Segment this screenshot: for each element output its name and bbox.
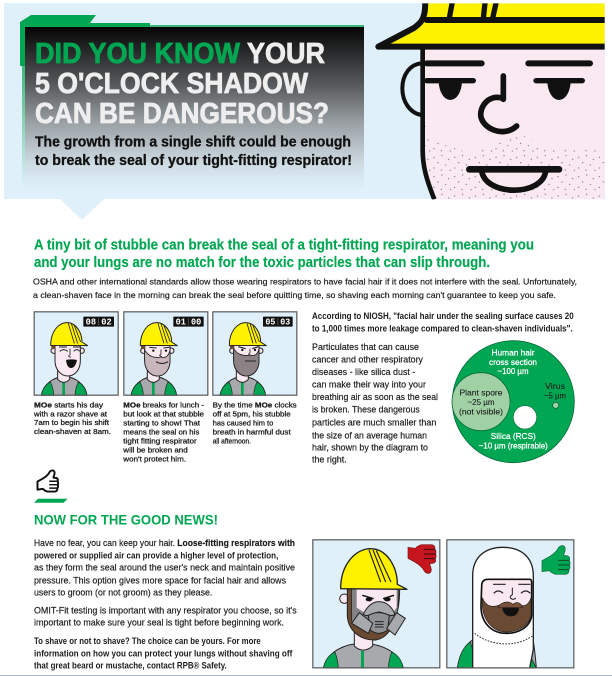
- headline: [34, 238, 534, 271]
- particulates paragraph: particles are much smaller than: [312, 418, 436, 428]
- good news paragraph 1: users to groom (or not groom) as they please.: [34, 588, 212, 598]
- particulates paragraph: breathing air as soon as the seal: [312, 392, 438, 402]
- illustration: worker face with hard hat: [378, 0, 605, 199]
- title: DID YOU KNOW YOUR: [35, 38, 325, 70]
- panel: bearded worker with loose-fitting hood: [446, 539, 574, 668]
- header banner: [4, 0, 605, 220]
- caption panel 2: will be broken and: [122, 446, 188, 454]
- good news paragraph 2: OMIT-Fit testing is important with any respirator you choose, so it's: [34, 605, 297, 615]
- caption panel 2: means the seal on his: [123, 428, 200, 436]
- virus: [544, 381, 566, 408]
- caption panel 1: [33, 400, 111, 436]
- good news heading: NOW FOR THE GOOD NEWS!: [34, 512, 218, 527]
- subtitle: The growth from a single shift could be enough: [35, 134, 351, 150]
- caption panel 1: clean-shaven at 8am.: [34, 427, 111, 436]
- caption panel 3: [213, 400, 297, 446]
- clock 08 02: 08 02: [86, 318, 112, 328]
- silica: Silica (RCS): [491, 431, 536, 441]
- human hair label: Human hair: [492, 348, 535, 358]
- plant spore: (not visible): [459, 406, 503, 416]
- caption panel 1: MOe starts his day: [34, 400, 103, 410]
- body: [457, 638, 536, 668]
- title: 5 O'CLOCK SHADOW: [35, 68, 309, 100]
- plant spore: [452, 373, 510, 431]
- virus: ~5 µm: [544, 390, 566, 400]
- icon: thumbs up outline: [37, 470, 58, 492]
- intro paragraph: a clean-shaven face in the morning can break the seal before quitting time, so shaving each morning can't guarantee to keep you safe.: [33, 290, 556, 300]
- NIOSH quote: [312, 311, 574, 334]
- green title tab: [20, 15, 364, 188]
- good news paragraph 3: [34, 636, 293, 671]
- panel: bearded worker with tight-fitting respirator: [312, 539, 440, 668]
- good news paragraph 1: Have no fear, you can keep your hair. Loose-fitting respirators with: [34, 538, 295, 548]
- plant spore: Plant spore: [460, 388, 503, 398]
- hard hat: [341, 549, 407, 589]
- particulates paragraph: is broken. These dangerous: [312, 405, 420, 415]
- good news paragraph 1: [34, 538, 295, 598]
- intro paragraph: OSHA and other international standards allow those wearing respirators to have facial hair if it does not interfere with the seal. Unfortunately,: [33, 276, 577, 286]
- headline: and your lungs are no match for the toxic particles that can slip through.: [34, 255, 490, 271]
- good news paragraph 3: that great beard or mustache, contact RPB® Safety.: [34, 661, 227, 671]
- eyes and nose: [493, 584, 530, 593]
- particulates paragraph: can make their way into your: [312, 380, 426, 390]
- intro paragraph: [33, 276, 577, 300]
- particulates paragraph: [312, 342, 438, 465]
- good news paragraph 1: pressure. This option gives more space for facial hair and allows: [34, 575, 286, 585]
- good news paragraph 2: important to make sure your seal is tight before beginning work.: [34, 618, 284, 628]
- human hair label: ~100 µm: [498, 366, 528, 376]
- caption panel 1: 7am to begin his shift: [34, 418, 110, 427]
- green accent bar: [34, 499, 68, 503]
- comic panel 1: clean-shaven at 8am: [34, 311, 119, 396]
- beard: [482, 598, 531, 632]
- silica: ~10 µm (respirable): [479, 440, 548, 450]
- body: [323, 629, 403, 668]
- icon: thumbs up: [542, 546, 570, 574]
- title: [35, 38, 329, 130]
- particulates paragraph: the size of an average human: [312, 430, 427, 440]
- human hair label: cross section: [489, 357, 537, 367]
- caption panel 2: starting to show! That: [123, 418, 201, 428]
- human hair label: [489, 348, 537, 376]
- virus: Virus: [545, 381, 565, 391]
- clock 01 00: 01 00: [176, 318, 201, 328]
- headline: A tiny bit of stubble can break the seal of a tight-fitting respirator, meaning you: [34, 238, 534, 254]
- particulates paragraph: the right.: [312, 455, 347, 465]
- caption panel 2: won't protect him.: [122, 454, 186, 464]
- particulates paragraph: cancer and other respiratory: [312, 354, 423, 364]
- subtitle: to break the seal of your tight-fitting respirator!: [35, 152, 352, 169]
- comic panel 3: full stubble at 5pm: [212, 311, 297, 396]
- caption panel 3: all afternoon.: [213, 436, 251, 446]
- particulates paragraph: hair, shown by the diagram to: [312, 443, 428, 453]
- title box: [25, 27, 364, 189]
- subtitle: [35, 134, 352, 169]
- caption panel 2: MOe breaks for lunch -: [123, 400, 204, 410]
- clock 05 03: 05 03: [265, 318, 290, 328]
- good news paragraph 3: information on how you can protect your lungs without shaving off: [34, 648, 293, 658]
- NIOSH quote: According to NIOSH, "facial hair under the sealing surface causes 20: [312, 311, 574, 321]
- caption panel 1: with a razor shave at: [33, 409, 108, 418]
- particulates paragraph: diseases - like silica dust -: [312, 367, 415, 377]
- caption panel 2: tight fitting respirator: [123, 436, 197, 446]
- silica: [479, 406, 548, 450]
- caption panel 3: has caused him to: [213, 418, 273, 428]
- good news paragraph 1: as they form the seal around the user's neck and maintain positive: [34, 563, 295, 573]
- particulates paragraph: Particulates that can cause: [312, 342, 419, 352]
- caption panel 3: By the time MOe clocks: [213, 400, 297, 410]
- hood: [473, 547, 533, 668]
- comic panel 2: stubble at lunch: [123, 311, 208, 396]
- icon: thumbs down: [408, 545, 436, 573]
- title: CAN BE DANGEROUS?: [35, 98, 329, 130]
- NIOSH quote: to 1,000 times more leakage compared to clean-shaven individuals".: [312, 324, 573, 334]
- good news paragraph 2: [34, 605, 297, 628]
- particle size diagram: [452, 341, 574, 463]
- caption panel 3: breath in harmful dust: [213, 428, 292, 436]
- good news paragraph 3: To shave or not to shave? The choice can be yours. For more: [34, 636, 261, 646]
- caption panel 2: [122, 400, 204, 464]
- caption panel 2: but look at that stubble: [123, 410, 204, 418]
- caption panel 3: off at 5pm, his stubble: [213, 410, 291, 418]
- plant spore: ~25 µm: [468, 397, 494, 407]
- respirator mask: [352, 602, 405, 635]
- good news paragraph 1: powered or supplied air can provide a higher level of protection,: [34, 551, 278, 561]
